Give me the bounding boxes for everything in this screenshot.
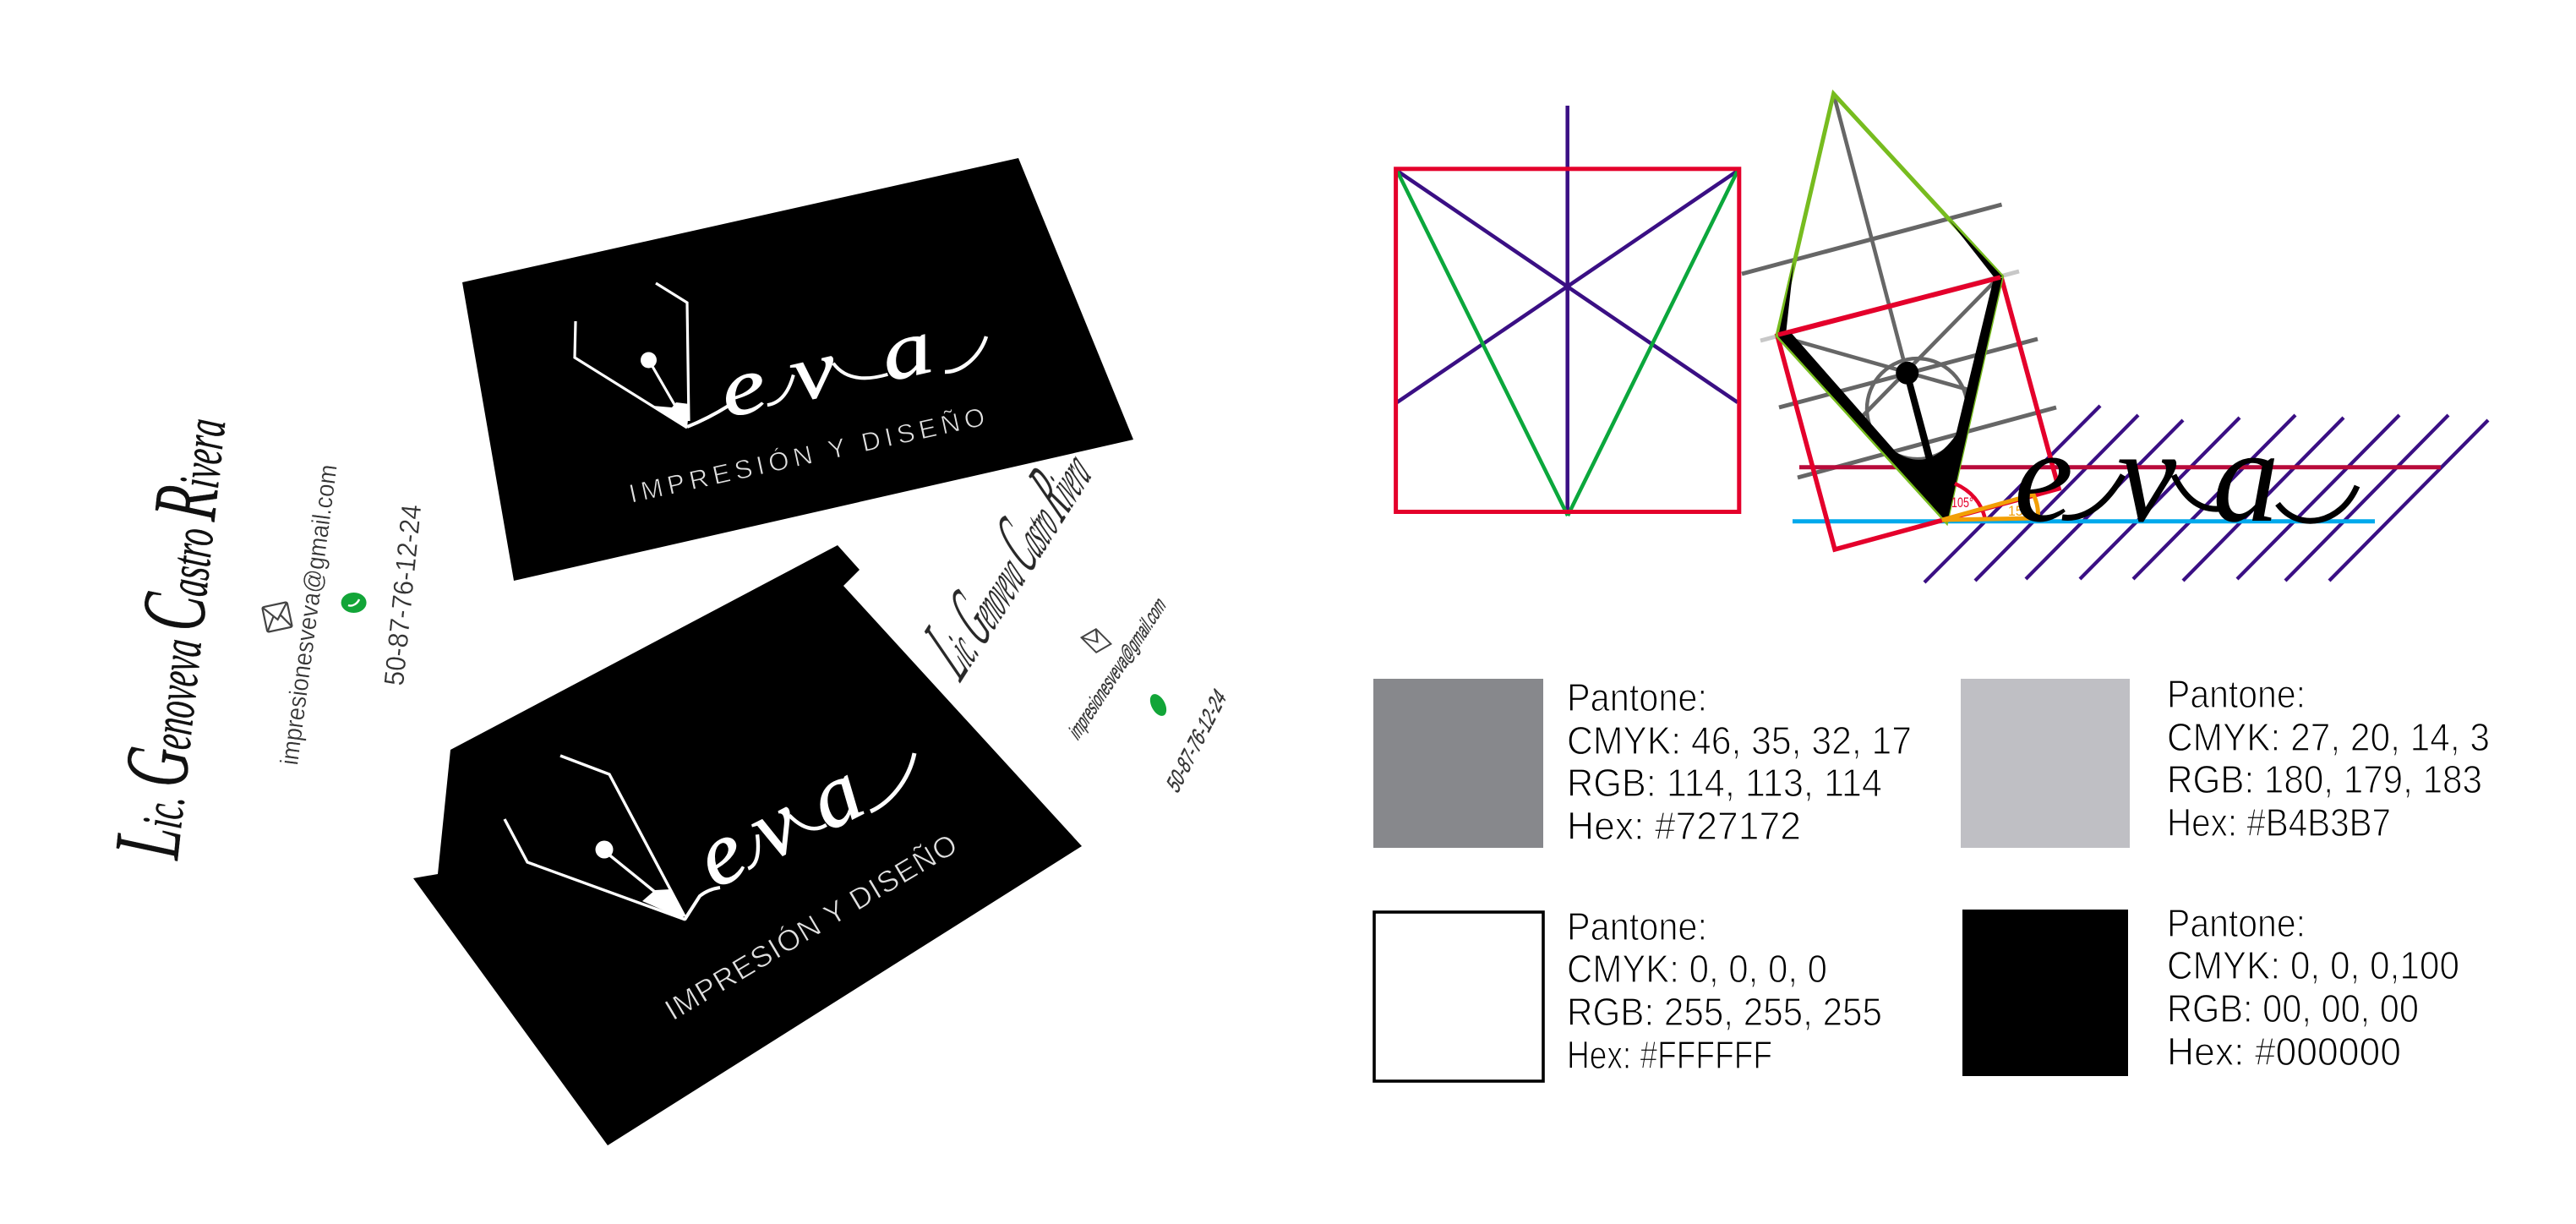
logo tail, upper card xyxy=(945,336,986,372)
logo wordmark: eva, upper card xyxy=(712,301,941,435)
colour specs: 000000: CMYK: 0, 0, 0,100 xyxy=(2167,943,2459,987)
contact name: Lic. Genoveva Castro Rivera xyxy=(94,412,246,864)
orange 15 degree wedge and label: 15° xyxy=(2008,503,2028,519)
logo wordmark: eva, construction: e xyxy=(2014,402,2073,550)
green nib outline xyxy=(1777,94,2001,522)
contact phone: 50-87-76-12-24 xyxy=(378,503,427,687)
logo wordmark: eva, construction xyxy=(2014,402,2357,550)
logo wordmark: eva, lower card: v xyxy=(734,773,815,879)
panel: card back, left contact block xyxy=(94,412,427,864)
colour specs: 000000: Pantone: xyxy=(2167,901,2306,945)
logo wordmark: eva, lower card xyxy=(679,740,878,907)
chart: logo construction square xyxy=(1396,106,1739,516)
icon: whatsapp phone, skewed xyxy=(1147,691,1170,719)
colour specs: 000000: RGB: 00, 00, 00 xyxy=(2167,986,2419,1030)
panel: card back, skewed contact block xyxy=(909,411,1230,799)
colour specs: 000000 xyxy=(2167,901,2459,1074)
slanted grey guides xyxy=(1742,94,2056,478)
icon: pen nib logo, lower card xyxy=(505,756,720,920)
logo tail, lower card xyxy=(870,753,914,811)
colour specs: 727172: Hex: #727172 xyxy=(1567,804,1801,848)
colour specs: 727172 xyxy=(1567,675,1912,848)
colour specs: FFFFFF: Pantone: xyxy=(1567,904,1707,948)
baseline and x-height guides xyxy=(1793,467,2441,522)
red 105 degree arc and label: 105° xyxy=(1951,495,1973,511)
colour specs: 727172: Pantone: xyxy=(1567,675,1707,719)
panel: business card front, lower xyxy=(413,545,1082,1145)
colour specs: B4B3B7: RGB: 180, 179, 183 xyxy=(2167,757,2482,801)
icon: whatsapp phone xyxy=(341,593,367,613)
colour specs: 000000: Hex: #000000 xyxy=(2167,1030,2401,1074)
colour specs: 727172: RGB: 114, 113, 114 xyxy=(1567,761,1882,805)
colour specs: B4B3B7: CMYK: 27, 20, 14, 3 xyxy=(2167,715,2490,759)
panel: business card front, upper xyxy=(462,158,1133,581)
logo wordmark: eva, construction: a xyxy=(2213,402,2279,550)
swatch: 000000 xyxy=(1962,910,2128,1076)
logo wordmark: eva, upper card: a xyxy=(872,301,941,399)
contact email, skewed: impresionesveva@gmail.com xyxy=(1067,592,1170,746)
logo wordmark: eva, lower card: a xyxy=(792,740,878,850)
hatch guides xyxy=(1924,406,2488,582)
logo wordmark: eva, construction: v xyxy=(2117,402,2177,550)
colour specs: FFFFFF xyxy=(1567,904,1882,1077)
colour specs: FFFFFF: Hex: #FFFFFF xyxy=(1567,1033,1772,1077)
panel: colour swatch grey xyxy=(1373,675,1912,848)
red 105 degree arc and label xyxy=(1951,484,1985,519)
panel: colour swatch light grey xyxy=(1961,672,2490,848)
icon: envelope xyxy=(262,602,292,632)
orange 15 degree wedge and label xyxy=(1942,495,2038,520)
contact email: impresionesveva@gmail.com xyxy=(276,463,343,767)
tagline, upper card: IMPRESIÓN Y DISEÑO xyxy=(626,402,987,509)
logo wordmark: eva, upper card: v xyxy=(781,323,844,419)
swatch: 727172 xyxy=(1373,679,1543,848)
panel: colour swatch black xyxy=(1962,901,2459,1076)
logo wordmark: eva, upper card: e xyxy=(712,339,774,435)
logo wordmark: eva, lower card: e xyxy=(679,801,761,907)
contact name, skewed: Lic. Genoveva Castro Rivera xyxy=(909,411,1105,700)
chart: pen nib and wordmark construction grid xyxy=(1742,94,2488,582)
swatch: B4B3B7 xyxy=(1961,679,2130,848)
colour specs: FFFFFF: CMYK: 0, 0, 0, 0 xyxy=(1567,947,1827,991)
swatch: FFFFFF xyxy=(1374,912,1543,1081)
colour specs: B4B3B7 xyxy=(2167,672,2490,844)
colour specs: FFFFFF: RGB: 255, 255, 255 xyxy=(1567,990,1882,1034)
colour specs: 727172: CMYK: 46, 35, 32, 17 xyxy=(1567,719,1912,762)
tagline, lower card: IMPRESIÓN Y DISEÑO xyxy=(659,828,963,1027)
black nib silhouette xyxy=(1778,220,2002,522)
red rotated square xyxy=(1777,277,2059,549)
icon: envelope, skewed xyxy=(1082,629,1111,653)
colour specs: B4B3B7: Hex: #B4B3B7 xyxy=(2167,801,2391,844)
icon: pen nib logo, upper card xyxy=(575,283,729,428)
panel: colour swatch white xyxy=(1374,904,1882,1081)
red top edge xyxy=(1778,277,2000,335)
colour specs: B4B3B7: Pantone: xyxy=(2167,672,2306,716)
contact phone, skewed: 50-87-76-12-24 xyxy=(1163,683,1230,799)
